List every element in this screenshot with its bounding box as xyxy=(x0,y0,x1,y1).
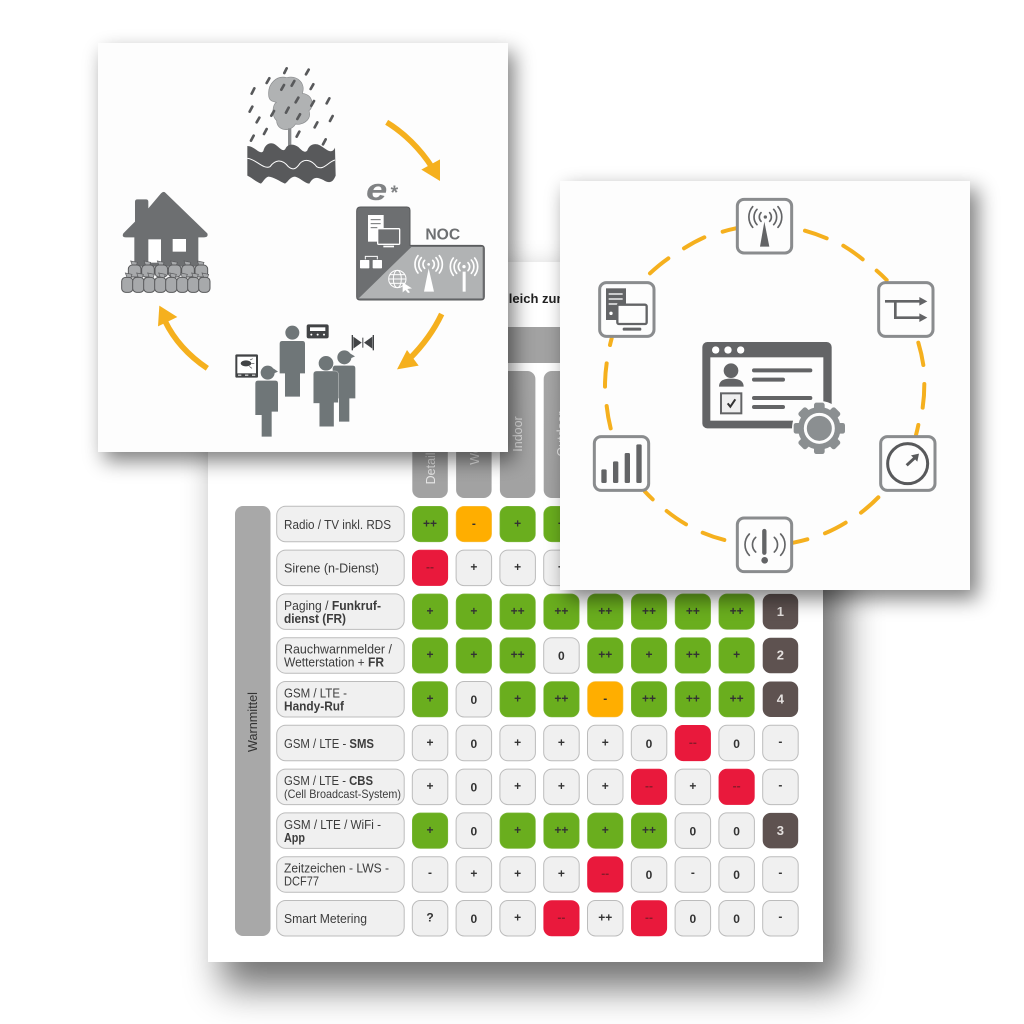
row: Smart Metering: + xyxy=(514,910,521,924)
row: GSM WiFi App: 0 xyxy=(471,824,478,838)
row: Paging: Paging / Funkruf- xyxy=(284,598,381,613)
row: GSM Handy-Ruf: + xyxy=(514,692,521,706)
column headers xyxy=(412,371,579,498)
row: Smart Metering: -- xyxy=(557,910,565,924)
row: GSM WiFi App: ++ xyxy=(642,823,656,837)
row: Rauchwarnmelder: + xyxy=(426,648,434,662)
row: GSM Handy-Ruf: ++ xyxy=(554,692,568,706)
row: GSM SMS: -- xyxy=(689,735,697,749)
row: GSM CBS xyxy=(277,769,798,805)
row: GSM Handy-Ruf: Handy-Ruf xyxy=(284,698,345,714)
row: Paging: + xyxy=(470,604,477,618)
row: Rauchwarnmelder xyxy=(277,638,798,673)
row: GSM SMS: GSM / LTE - SMS xyxy=(284,736,374,751)
row: GSM CBS: + xyxy=(426,779,434,793)
row: Sirene: -- xyxy=(426,560,434,574)
row: Zeitzeichen: - xyxy=(778,866,782,880)
column headers: Indoor xyxy=(511,416,525,452)
row: GSM Handy-Ruf xyxy=(277,682,798,717)
icon: routing arrows xyxy=(879,283,933,336)
row: Rauchwarnmelder: ++ xyxy=(511,648,525,662)
label: NOC: NOC xyxy=(425,226,460,243)
icon: siren xyxy=(352,335,374,350)
row: GSM CBS: -- xyxy=(645,779,653,793)
row: Smart Metering: ? xyxy=(426,910,434,924)
row: Paging: ++ xyxy=(686,604,700,618)
row: Smart Metering: - xyxy=(778,910,782,924)
row: Smart Metering: Smart Metering xyxy=(284,911,367,926)
row: Zeitzeichen: Zeitzeichen - LWS - xyxy=(284,861,389,876)
center: dashboard window with gear xyxy=(702,342,847,456)
row: Rauchwarnmelder: ++ xyxy=(598,648,612,662)
row: GSM WiFi App: 3 xyxy=(777,823,784,838)
row: GSM Handy-Ruf: - xyxy=(603,692,607,706)
row: Zeitzeichen xyxy=(277,857,798,892)
row: GSM WiFi App: GSM / LTE / WiFi - xyxy=(284,817,381,832)
icon: people with warning devices xyxy=(235,324,374,437)
row: Paging xyxy=(277,594,798,629)
row: GSM Handy-Ruf: GSM / LTE - xyxy=(284,686,347,700)
row group label: Warnmittel: Warnmittel xyxy=(245,692,260,752)
icon: antenna xyxy=(737,199,792,253)
row: Smart Metering xyxy=(277,900,798,936)
icon: alert signal xyxy=(737,518,792,572)
row: Zeitzeichen: DCF77 xyxy=(284,874,319,889)
row: Radio / TV: - xyxy=(472,516,476,530)
row: GSM SMS xyxy=(277,725,798,761)
row: GSM WiFi App: + xyxy=(602,823,609,837)
row: GSM CBS: + xyxy=(602,779,609,793)
row: GSM CBS: - xyxy=(778,778,782,792)
header band xyxy=(208,327,823,363)
row: Rauchwarnmelder: + xyxy=(645,648,653,662)
row: Smart Metering: 0 xyxy=(733,912,740,926)
row: GSM SMS: 0 xyxy=(471,737,478,751)
row: Rauchwarnmelder: 2 xyxy=(777,648,784,663)
row: Sirene: + xyxy=(470,560,477,574)
panel: warning cycle xyxy=(98,43,514,461)
icon: tablet with bug xyxy=(235,354,258,378)
row: GSM Handy-Ruf: ++ xyxy=(730,692,744,706)
row: GSM CBS: GSM / LTE - CBS xyxy=(284,773,373,788)
icon: NOC block xyxy=(357,207,484,300)
row: Smart Metering: 0 xyxy=(471,912,478,926)
row: GSM CBS: + xyxy=(689,779,696,793)
icon: storm tree and flood xyxy=(247,68,336,184)
arrow: storm to NOC xyxy=(387,122,440,181)
arrow: NOC to people xyxy=(397,314,442,369)
row: Rauchwarnmelder: ++ xyxy=(686,648,700,662)
row: Paging: ++ xyxy=(511,604,525,618)
row: Rauchwarnmelder: + xyxy=(733,648,740,662)
icon: server and monitor xyxy=(600,283,654,336)
icon: house with sandbags xyxy=(122,192,210,292)
row: Smart Metering: ++ xyxy=(598,910,612,924)
arrow: people to house xyxy=(158,306,207,368)
row: GSM WiFi App: + xyxy=(426,823,434,837)
panel: monitoring platform xyxy=(560,181,978,599)
row: GSM Handy-Ruf: ++ xyxy=(642,692,656,706)
row: Zeitzeichen: + xyxy=(558,867,565,881)
row: Paging: 1 xyxy=(777,604,784,619)
table title: Vergleich zum xyxy=(481,291,568,306)
row: GSM Handy-Ruf: + xyxy=(426,692,434,706)
row: Smart Metering: -- xyxy=(645,910,653,924)
row: GSM WiFi App: 0 xyxy=(690,824,697,838)
row: Sirene xyxy=(277,550,579,586)
row: Paging: ++ xyxy=(598,604,612,618)
row: Rauchwarnmelder: Wetterstation + FR xyxy=(284,655,385,670)
row: Zeitzeichen: -- xyxy=(601,867,609,881)
icon: bar chart xyxy=(594,437,649,490)
row: GSM CBS: -- xyxy=(733,779,741,793)
row: Paging: ++ xyxy=(730,604,744,618)
row: Paging: dienst (FR) xyxy=(284,611,346,626)
row: GSM CBS: 0 xyxy=(471,781,478,795)
row: Radio / TV: Radio / TV inkl. RDS xyxy=(284,517,391,532)
row: GSM WiFi App: App xyxy=(284,830,305,845)
logo: e: e xyxy=(366,173,387,207)
row: GSM CBS: + xyxy=(558,779,565,793)
row: Radio / TV xyxy=(277,506,579,542)
logo asterisk: * xyxy=(391,183,399,204)
row: GSM WiFi App: 0 xyxy=(733,824,740,838)
row: GSM CBS: (Cell Broadcast-System) xyxy=(284,787,401,801)
row: Zeitzeichen: 0 xyxy=(733,868,740,882)
row: GSM CBS: + xyxy=(514,779,521,793)
row: GSM Handy-Ruf: ++ xyxy=(686,692,700,706)
row: GSM Handy-Ruf: 0 xyxy=(471,693,478,707)
row: GSM WiFi App: + xyxy=(514,823,521,837)
row: GSM SMS: + xyxy=(426,735,434,749)
icon: gear xyxy=(792,401,847,456)
row: Rauchwarnmelder: 0 xyxy=(558,649,565,663)
row: Sirene: Sirene (n-Dienst) xyxy=(284,561,379,576)
row: Sirene: + xyxy=(558,560,565,574)
row: GSM SMS: + xyxy=(602,735,609,749)
row: GSM Handy-Ruf: 4 xyxy=(777,692,785,706)
row: GSM WiFi App xyxy=(277,813,798,848)
row: GSM SMS: + xyxy=(558,735,565,749)
row: Smart Metering: 0 xyxy=(690,912,697,926)
row: Rauchwarnmelder: Rauchwarnmelder / xyxy=(284,642,392,657)
row: Radio / TV: + xyxy=(514,516,521,530)
row: Zeitzeichen: - xyxy=(428,866,432,880)
icon: pager xyxy=(307,324,329,338)
row: Paging: + xyxy=(426,604,434,618)
panel: comparison table card xyxy=(208,262,844,988)
row: GSM WiFi App: ++ xyxy=(554,823,568,837)
row: Zeitzeichen: 0 xyxy=(646,868,653,882)
column headers: Outdoor xyxy=(555,411,569,457)
row: Zeitzeichen: + xyxy=(470,867,477,881)
row group label: Warnmittel xyxy=(235,506,270,936)
row: Rauchwarnmelder: + xyxy=(470,648,477,662)
dashed ring xyxy=(605,228,924,543)
row: Paging: ++ xyxy=(642,604,656,618)
column headers: Weckeffekt xyxy=(468,403,482,465)
row: GSM SMS: 0 xyxy=(733,737,740,751)
column headers: Detaillierungsgrad xyxy=(424,384,438,484)
row: Paging: ++ xyxy=(554,604,568,618)
row: Radio / TV: ++ xyxy=(423,516,437,530)
row: Radio / TV: + xyxy=(558,516,565,530)
row: GSM SMS: + xyxy=(514,735,521,749)
row: GSM SMS: 0 xyxy=(646,737,653,751)
icon: gauge xyxy=(881,437,935,490)
row: Zeitzeichen: - xyxy=(691,866,695,880)
row: Zeitzeichen: + xyxy=(514,867,521,881)
row: GSM SMS: - xyxy=(778,734,782,748)
row: Sirene: + xyxy=(514,560,521,574)
